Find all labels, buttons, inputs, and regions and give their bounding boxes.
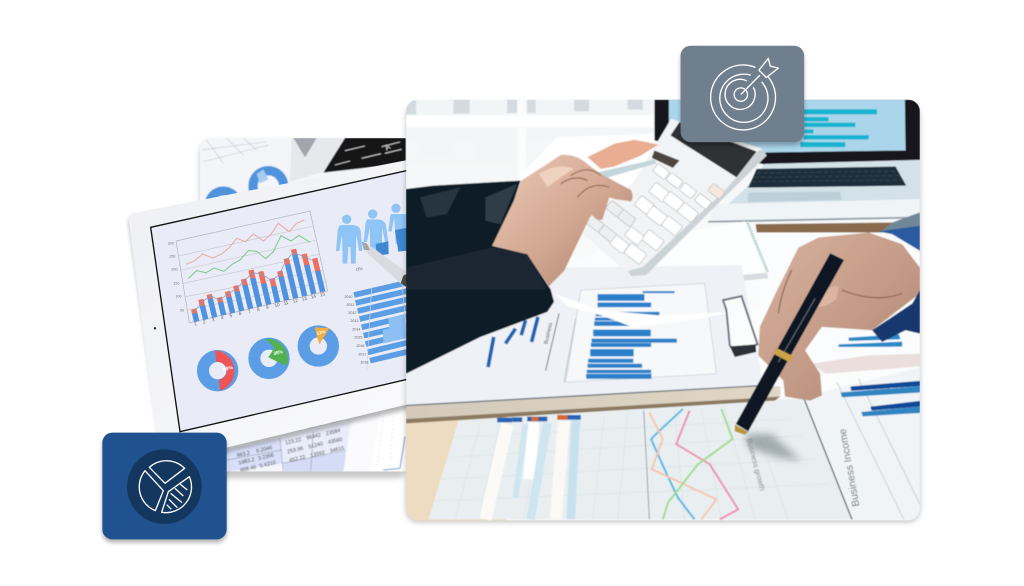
table figures: 5.4210 xyxy=(259,460,276,470)
infographic: business analytics photo collage xyxy=(100,46,923,545)
stylus pen xyxy=(362,242,408,287)
chart: bars and lines: 11 xyxy=(283,300,289,306)
chart: bars and lines: 3 xyxy=(211,317,215,323)
chart: horizontal bars: 2018 xyxy=(360,361,368,365)
table figures: 943.33 xyxy=(285,426,303,435)
panel: right photo of business people with calculator and reports xyxy=(406,100,920,522)
chart: bars and lines xyxy=(168,211,328,327)
chart: bars and lines: 13 xyxy=(301,296,308,302)
table figures: 26536 xyxy=(308,412,324,421)
chart: horizontal bars: 2013 xyxy=(350,319,358,323)
chart: bars and lines: 10 xyxy=(274,302,281,308)
table figures: 452.22 xyxy=(289,455,306,464)
donut chart: 38% xyxy=(254,339,288,373)
window background xyxy=(406,100,654,115)
chart: horizontal bars: 2011 xyxy=(346,303,354,307)
metal clip xyxy=(723,296,758,357)
clipboard with bar chart report xyxy=(406,265,780,423)
chart: bars and lines: 8 xyxy=(256,307,260,312)
chart: horizontal bars: 2014 xyxy=(352,327,360,331)
calculator keys xyxy=(585,163,725,265)
chart: bars and lines: 1 xyxy=(193,321,197,327)
lower report with line chart xyxy=(406,399,855,521)
left sleeve xyxy=(406,181,554,374)
table figures: 34615 xyxy=(329,446,345,455)
chart: bars and lines: 150 xyxy=(173,281,179,285)
chart: bars and lines: 2 xyxy=(202,319,206,325)
panel: left tablet photo: A xyxy=(383,142,392,152)
chart: bars and lines: 5 xyxy=(229,313,233,318)
chart: bars and lines: 12 xyxy=(292,298,299,304)
chart: bars and lines: 200 xyxy=(171,268,177,272)
white calculator xyxy=(582,119,767,276)
table figures: 75263 xyxy=(326,417,342,426)
table figures xyxy=(236,420,345,472)
table figures: 96442 xyxy=(306,432,322,442)
table figures: 868.46 xyxy=(240,465,257,474)
chart: bars and lines: 15 xyxy=(319,291,326,298)
donut chart: 99% xyxy=(203,350,234,391)
chart: horizontal bars: 2012 xyxy=(348,311,356,315)
black pen xyxy=(735,253,844,435)
table figures: 1983.2 xyxy=(238,457,255,467)
chart: bars and lines: 14 xyxy=(310,294,317,300)
table figures: 29024 xyxy=(327,408,343,417)
icon: segmented pie xyxy=(139,461,192,513)
chart: bars and lines: 7 xyxy=(247,309,251,314)
desk papers behind xyxy=(756,232,871,234)
chart: horizontal bars: 2015 xyxy=(354,336,362,340)
chart: bars and lines: 6 xyxy=(238,311,242,316)
chart: horizontal bars: 2016 xyxy=(356,344,364,348)
table figures: 6.2046 xyxy=(256,445,273,455)
table figures: 43560 xyxy=(327,437,343,446)
table figures: 253.96 xyxy=(287,446,304,455)
finger behind calculator xyxy=(587,140,658,169)
laptop xyxy=(654,100,920,233)
donut chart: 12%: 12% xyxy=(316,329,326,336)
right hand xyxy=(758,233,920,401)
table figures: 23584 xyxy=(325,428,341,437)
icon card: target xyxy=(681,46,804,145)
chart: bars and lines: 100 xyxy=(175,295,181,299)
chart: bars and lines: 4 xyxy=(220,315,224,320)
notebook xyxy=(742,220,770,281)
icon: target with arrow xyxy=(711,58,778,130)
right report with bars xyxy=(802,334,920,519)
panel: left tablet photo xyxy=(128,138,433,478)
blue shirt cuff xyxy=(872,290,920,342)
right report with bars: Business Income xyxy=(838,428,862,507)
chart: horizontal bars: 2010 xyxy=(344,295,352,299)
chart: horizontal bars: 2017 xyxy=(358,352,366,356)
table figures: 13592 xyxy=(310,450,326,459)
table figures: 863.26 xyxy=(287,417,304,426)
table figures: 51240 xyxy=(308,441,324,450)
chart: bars and lines: 250 xyxy=(169,254,175,258)
donut chart: 12% xyxy=(304,327,333,361)
icon card: pie chart xyxy=(102,433,227,543)
table figures: 983.2 xyxy=(236,450,251,459)
chart: bars and lines: 300 xyxy=(168,241,174,245)
tablet xyxy=(129,155,433,463)
donut chart: 99%: 99% xyxy=(223,365,234,373)
clipboard with bar chart report: Business xyxy=(543,322,554,345)
chart: bars and lines: 50 xyxy=(180,308,184,312)
donut chart: 38%: 38% xyxy=(273,349,284,356)
chart: bars and lines: 9 xyxy=(266,304,270,310)
lower report with line chart: Business growth xyxy=(745,437,767,492)
stylus in left hand xyxy=(598,160,656,179)
table figures: 123.22 xyxy=(285,437,302,447)
table figures: 12978 xyxy=(307,421,322,430)
chart: horizontal bars xyxy=(344,277,433,371)
table figures: 3.2356 xyxy=(257,453,275,462)
left hand xyxy=(492,155,633,286)
icons: people: 0% xyxy=(356,266,363,272)
icons: people xyxy=(336,204,413,272)
